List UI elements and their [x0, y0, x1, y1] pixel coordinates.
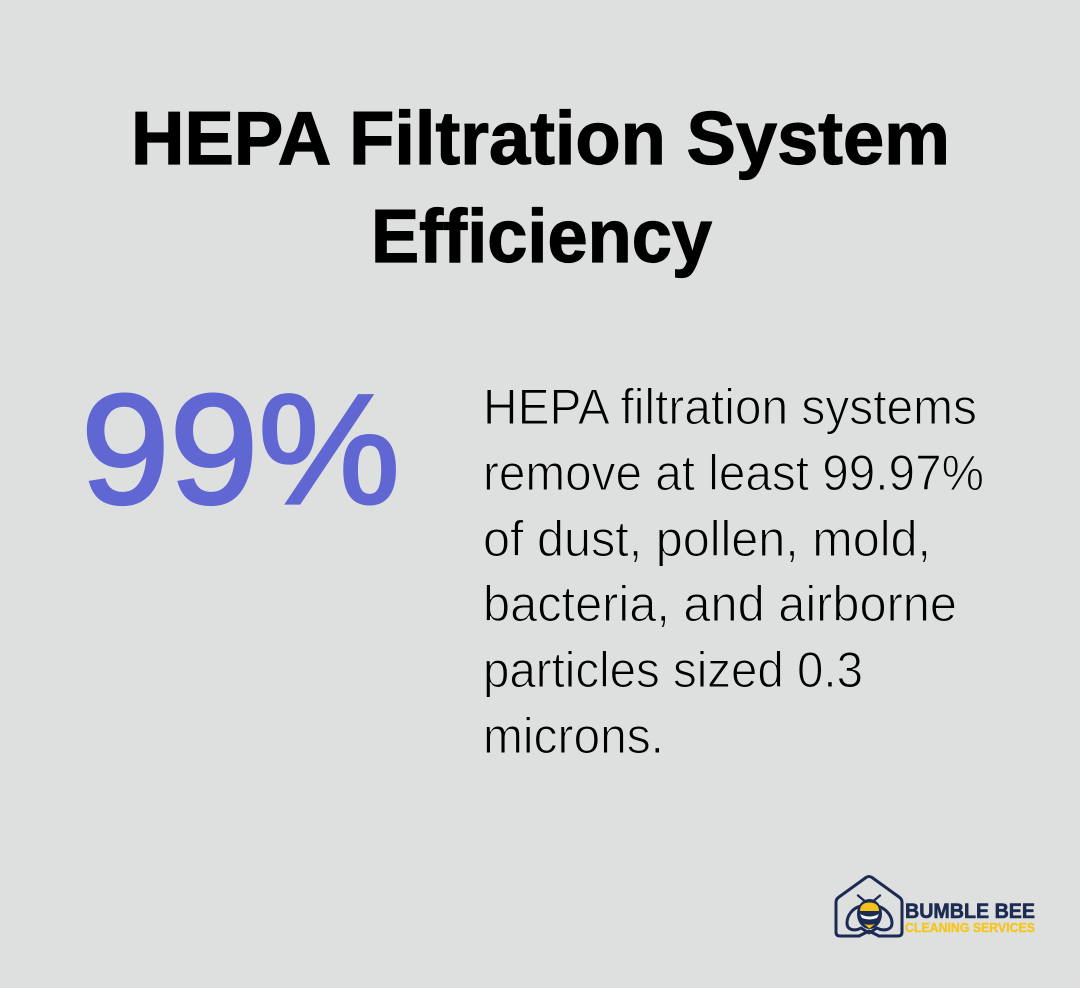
description text block: particles sized 0.3 — [483, 642, 863, 698]
description text block: microns. — [483, 708, 664, 764]
description text block: HEPA filtration systems — [483, 379, 977, 435]
description text block — [483, 379, 984, 764]
big stat: 99%: 99% — [81, 363, 400, 537]
logo wordmark: CLEANING SERVICES — [905, 920, 1035, 935]
title — [131, 96, 950, 278]
title: Efficiency — [371, 194, 712, 278]
logo wordmark: BUMBLE BEE — [905, 900, 1035, 923]
logo: Bumble Bee Cleaning Services — [836, 876, 1035, 936]
logo wordmark — [905, 900, 1035, 935]
description text block: of dust, pollen, mold, — [483, 511, 931, 567]
description text block: remove at least 99.97% — [483, 445, 984, 501]
title: HEPA Filtration System — [131, 96, 950, 180]
description text block: bacteria, and airborne — [483, 576, 957, 632]
icon: house with bee — [836, 876, 902, 936]
